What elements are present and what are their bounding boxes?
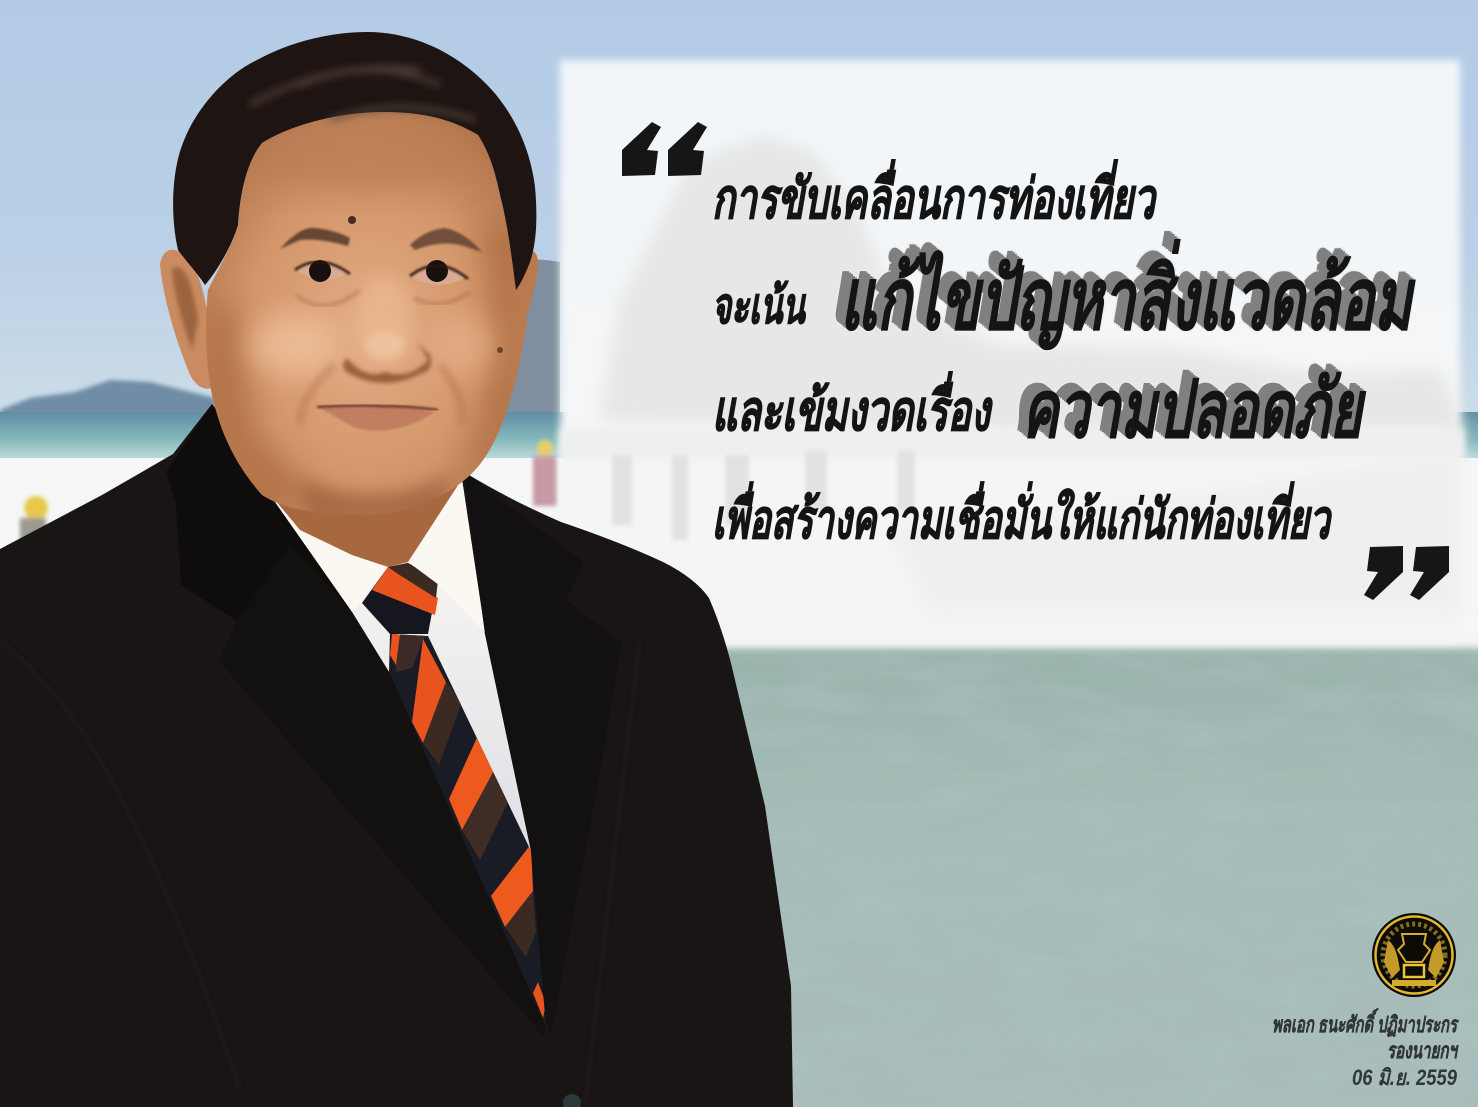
hair [173, 32, 536, 290]
right ear [505, 250, 538, 340]
attribution text [1272, 1008, 1459, 1090]
neck [275, 440, 462, 567]
shirt [270, 479, 531, 851]
shirt collar [270, 479, 485, 632]
panel: translucent white quote backdrop [560, 60, 1465, 642]
suit jacket [0, 404, 793, 1107]
left ear [160, 250, 214, 389]
tourist with yellow hat [20, 496, 48, 548]
tie knot [362, 563, 438, 634]
line 2 lead: จะเน้น [712, 278, 806, 334]
jacket button [563, 1094, 581, 1107]
faded tourists [612, 450, 915, 540]
date: 06 มิ.ย. 2559 [1352, 1065, 1458, 1090]
faded rock island [600, 135, 1465, 430]
icon: government seal [1372, 913, 1456, 997]
right lapel [464, 472, 622, 1035]
closing quotation mark [1364, 546, 1449, 600]
opening quotation mark [622, 122, 707, 176]
nose [343, 340, 431, 383]
left lapel [219, 544, 546, 1036]
left collar of jacket [166, 404, 352, 621]
line 1: การขับเคลื่อนการท่องเที่ยว [712, 159, 1157, 230]
faded boat [890, 450, 1460, 610]
smile folds [300, 365, 462, 425]
hair sheen [250, 68, 475, 120]
moles [348, 216, 356, 224]
necktie [362, 563, 546, 1027]
sand [0, 458, 1478, 658]
quote text [712, 159, 1416, 550]
person: politician portrait [0, 32, 793, 1107]
right eye [410, 260, 470, 304]
distant mountain [0, 380, 215, 415]
tourist at panel edge [533, 440, 557, 506]
left eye [295, 260, 360, 305]
jacket folds [0, 640, 640, 1107]
face shading [206, 146, 527, 515]
water [0, 648, 1478, 1107]
mouth [317, 405, 438, 431]
eyebrows [280, 228, 350, 249]
rock island behind man [500, 260, 560, 422]
face [206, 112, 527, 515]
sea band [0, 412, 1478, 462]
line 3 lead: และเข้มงวดเรื่อง [712, 371, 993, 442]
